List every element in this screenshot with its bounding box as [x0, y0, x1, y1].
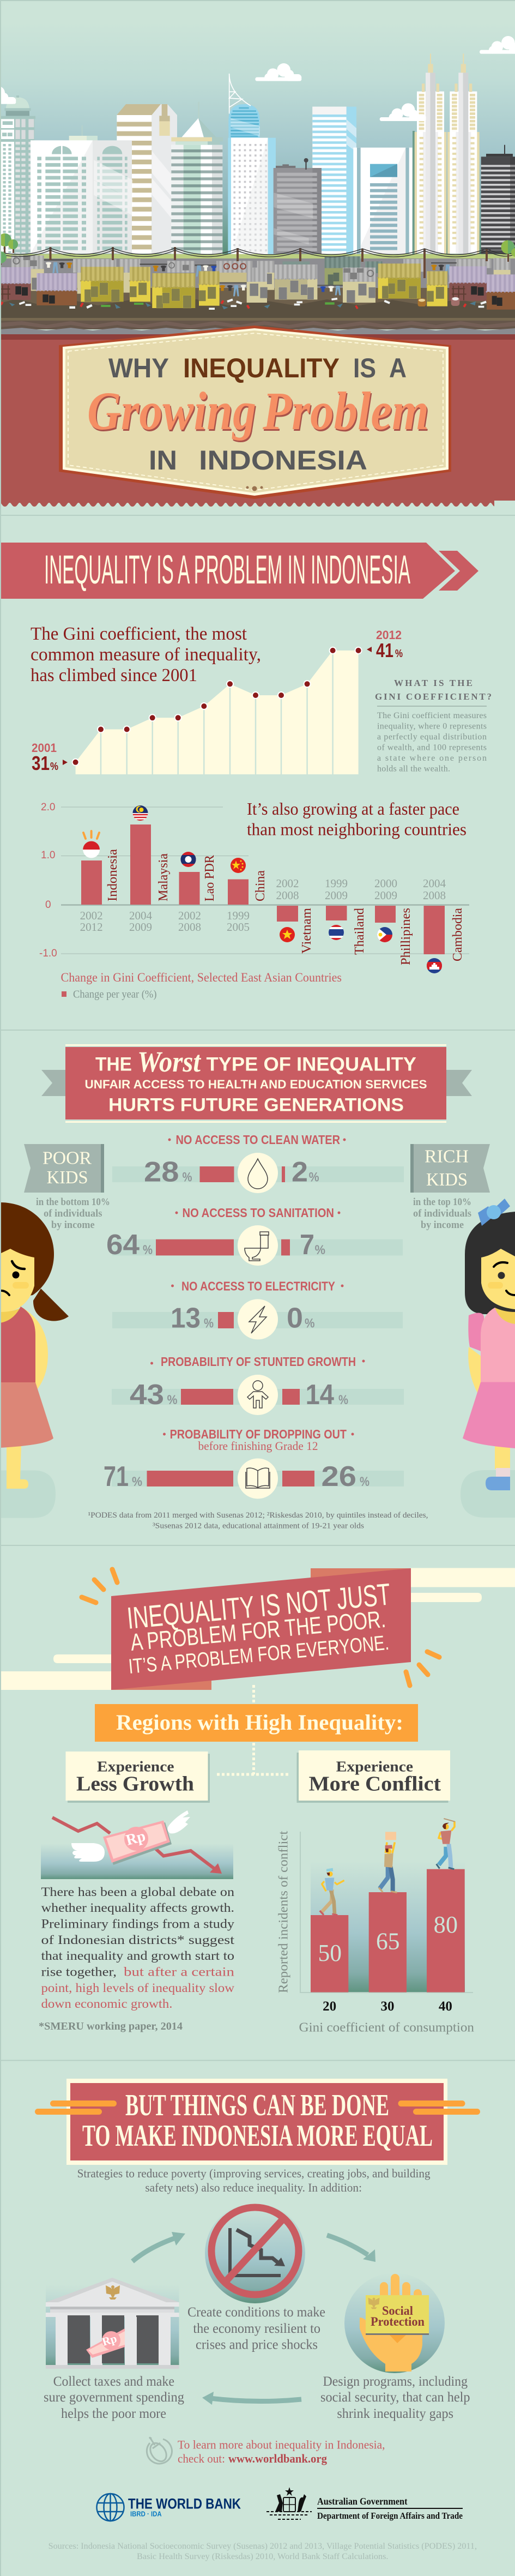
chart caption and legend: Change in Gini Coefficient, Selected East Asian Countries	[61, 971, 342, 984]
gini definition text: inequality, where 0 represents	[377, 721, 487, 731]
row: no access to electricity	[112, 1279, 403, 1339]
chart: conflict by gini: 30	[380, 1999, 395, 2014]
orange heading: regions with high inequality: Regions with High Inequality:	[116, 1710, 403, 1735]
call to action: To learn more about inequality in Indonesia,	[178, 2437, 385, 2451]
logo: australian government: Department of Foreign Affairs and Trade	[317, 2511, 463, 2521]
text: collect taxes: helps the poor more	[61, 2406, 166, 2421]
text: collect taxes	[44, 2374, 184, 2421]
arrow: no-chart to hand	[327, 2235, 375, 2262]
illustration: government building: Rp	[100, 2332, 118, 2349]
label 2001: %	[50, 761, 58, 773]
label 2012: %	[395, 648, 403, 660]
rich kids description: by income	[421, 1219, 464, 1231]
intro text: strategies	[77, 2166, 431, 2194]
text: create conditions: the economy resilient to	[193, 2321, 320, 2336]
gini definition text	[375, 678, 492, 773]
title line 1: INEQUALITY	[183, 353, 340, 383]
sources: Basic Health Survey (Riskesdas) 2010, World Bank Staff Calculations.	[137, 2552, 388, 2561]
icon: lightning bolt	[249, 1306, 266, 1333]
neighbours headline	[247, 799, 466, 839]
row: no access to electricity: 13	[171, 1302, 201, 1334]
skewed callout: not just a problem for the poor: IT’S A PROBLEM FOR EVERYONE.	[128, 1632, 390, 1678]
row: no access to electricity: NO ACCESS TO ELECTRICITY	[181, 1279, 335, 1293]
row: no access to sanitation: %	[315, 1243, 325, 1257]
row: no access to clean water: %	[182, 1170, 192, 1185]
gini headline: The Gini coefficient, the most	[31, 624, 247, 644]
footnotes: ³Susenas 2012 data, educational attainment of 19-21 year olds	[153, 1521, 364, 1530]
header ribbon: worst type of inequality: TYPE OF INEQUALITY	[206, 1054, 416, 1075]
country labels: Lao PDR	[203, 855, 217, 901]
logo: the world bank: THE WORLD BANK	[128, 2496, 241, 2512]
utility poles and wires	[0, 247, 515, 278]
huts right	[253, 256, 515, 310]
header ribbon: worst type of inequality	[41, 1044, 472, 1123]
row: probability of dropping out	[104, 1427, 404, 1498]
row: probability of dropping out: 26	[322, 1461, 356, 1492]
title line 1: IS	[353, 353, 376, 383]
year labels: 2008	[178, 920, 201, 934]
illustration: flying money and falling arrow: Rp	[124, 1828, 147, 1849]
chart: conflict by gini: Gini coefficient of consumption	[299, 2021, 474, 2035]
year labels: 1999	[325, 877, 348, 890]
country labels: Malaysia	[156, 853, 171, 901]
section heading arrow banner	[0, 543, 478, 599]
title script line: Growing	[87, 381, 256, 441]
year labels: 2005	[227, 920, 250, 934]
country labels	[106, 849, 465, 965]
row: no access to clean water: NO ACCESS TO CLEAN WATER	[175, 1133, 340, 1147]
illustration: flying money and falling arrow	[41, 1810, 233, 1879]
skewed callout: not just a problem for the poor	[0, 1568, 515, 1690]
box: experience more conflict: Experience	[336, 1759, 413, 1775]
title line 3: INDONESIA	[199, 445, 367, 476]
country labels: Indonesia	[106, 849, 120, 901]
call to action	[147, 2437, 385, 2465]
row: no access to sanitation: NO ACCESS TO SANITATION	[182, 1206, 334, 1220]
neighbours headline: It’s also growing at a faster pace	[247, 799, 459, 818]
text: design programs: Design programs, including	[323, 2374, 468, 2389]
chart: conflict by gini: 65	[376, 1928, 400, 1954]
title badge	[59, 326, 451, 499]
text: growth explanation: There has been a global debate on	[41, 1885, 235, 1899]
country labels: China	[253, 870, 268, 901]
icon: no falling chart	[205, 2203, 305, 2303]
icon: mouse	[147, 2437, 172, 2464]
illustration: poor girl	[0, 1202, 69, 1518]
row: no access to sanitation	[106, 1206, 403, 1266]
text: growth explanation: rise together,	[41, 1965, 117, 1978]
gini definition text: holds all the wealth.	[377, 765, 450, 773]
header ribbon: worst type of inequality: UNFAIR ACCESS TO HEALTH AND EDUCATION SERVICES	[85, 1078, 427, 1091]
icon: open book	[246, 1468, 270, 1488]
rich kids description: in the top 10%	[413, 1196, 471, 1208]
country labels: Thailand	[353, 908, 367, 955]
row: probability of dropping out: %	[360, 1474, 369, 1489]
footnotes: ¹PODES data from 2011 merged with Susenas 2012; ²Riskesdas 2010, by quintiles instead of deciles,	[88, 1511, 428, 1520]
arrow: hand to bank	[202, 2392, 301, 2405]
label 2012: 41	[376, 639, 393, 661]
title line 3: IN	[149, 445, 177, 476]
wing left	[71, 1843, 105, 1862]
huts left	[0, 255, 262, 310]
text: growth explanation: whether inequality affects growth.	[41, 1901, 234, 1915]
buildings left half	[0, 86, 223, 255]
title script line	[87, 381, 430, 443]
year labels	[80, 877, 446, 934]
icon: child	[247, 1381, 268, 1408]
intro text: strategies: Strategies to reduce poverty (improving services, creating jobs, and building	[77, 2166, 431, 2180]
chart: change in gini by country: 1.0	[41, 850, 55, 861]
gini headline	[31, 624, 261, 685]
title script line: Problem	[263, 382, 430, 443]
tag: poor kids: KIDS	[47, 1167, 88, 1188]
illustration: social protection hand	[344, 2273, 445, 2373]
text: collect taxes: Collect taxes and make	[53, 2374, 174, 2389]
year labels: 2004	[423, 877, 446, 890]
text: growth explanation: Preliminary findings from a study	[41, 1917, 235, 1930]
tag: rich kids	[410, 1144, 490, 1193]
call to action: www.worldbank.org	[228, 2452, 327, 2465]
title line 1	[108, 353, 407, 383]
box: experience less growth: Experience	[97, 1759, 174, 1775]
tag: poor kids	[24, 1144, 104, 1193]
chart: conflict by gini: 50	[318, 1940, 342, 1966]
row: no access to electricity: %	[305, 1316, 315, 1331]
source note: SMERU: *SMERU working paper, 2014	[39, 2020, 183, 2032]
year labels: 2008	[276, 889, 299, 902]
gini definition text: GINI COEFFICIENT?	[375, 691, 492, 702]
row: no access to clean water: %	[309, 1170, 319, 1185]
chart: conflict by gini: 80	[434, 1911, 458, 1938]
row: no access to electricity: 0	[287, 1302, 303, 1334]
text: design programs	[320, 2374, 470, 2421]
flags	[82, 805, 443, 974]
sources	[49, 2542, 477, 2561]
illustration: social protection hand: Protection	[371, 2315, 425, 2328]
row: probability of stunted growth: %	[167, 1393, 178, 1407]
country labels: Phillipines	[399, 908, 413, 965]
gini definition text: a state where one person	[377, 754, 487, 763]
year labels: 2002	[276, 877, 299, 890]
text: create conditions	[187, 2305, 325, 2352]
header ribbon: worst type of inequality: THE	[95, 1054, 132, 1075]
gini definition text: of wealth, and 100 represents	[377, 743, 487, 752]
label 2012: 2012	[376, 628, 402, 642]
illustration: riverside shanty town	[0, 233, 515, 334]
year labels: 2009	[374, 889, 397, 902]
year labels: 1999	[227, 909, 250, 922]
title line 1: A	[389, 353, 407, 383]
text: growth explanation: point, high levels of inequality slow	[41, 1981, 234, 1995]
poor kids description	[36, 1196, 110, 1231]
arrow: bank to no-chart	[132, 2232, 185, 2261]
text: growth explanation: but after a certain	[124, 1965, 235, 1978]
trees	[0, 233, 515, 265]
neighbours headline: than most neighboring countries	[247, 819, 466, 839]
embankment	[0, 254, 515, 259]
dotted connectors	[217, 1685, 290, 1774]
year labels: 2002	[178, 909, 201, 922]
logo: the world bank	[97, 2494, 241, 2521]
illustration: rich girl	[461, 1199, 515, 1518]
header ribbon: worst type of inequality: Worst	[137, 1045, 202, 1078]
country labels: Vietnam	[300, 908, 314, 954]
icon: water drop	[248, 1159, 268, 1189]
illustration: government building	[46, 2278, 179, 2369]
skewed callout: not just a problem for the poor: INEQUALITY IS NOT JUST	[125, 1576, 392, 1635]
label 2012	[367, 628, 403, 661]
row: probability of dropping out: before finishing Grade 12	[198, 1439, 318, 1453]
row: no access to clean water	[112, 1133, 404, 1193]
row: probability of stunted growth: PROBABILITY OF STUNTED GROWTH	[161, 1355, 356, 1369]
row: probability of stunted growth	[112, 1355, 404, 1415]
row: no access to clean water: 28	[144, 1157, 179, 1188]
row: probability of stunted growth: 14	[306, 1379, 334, 1411]
header ribbon: worst type of inequality: HURTS FUTURE GENERATIONS	[108, 1095, 404, 1116]
label 2001	[32, 741, 68, 774]
logo: australian government	[266, 2487, 463, 2521]
chart caption and legend: Change per year (%)	[73, 988, 157, 1000]
gini headline: common measure of inequality,	[31, 645, 261, 665]
year labels: 2009	[325, 889, 348, 902]
row: probability of dropping out: PROBABILITY OF DROPPING OUT	[170, 1427, 347, 1441]
year labels: 2004	[129, 909, 153, 922]
text: create conditions: crises and price shocks	[196, 2337, 318, 2352]
illustration: city skyline	[0, 0, 515, 256]
tag: rich kids: RICH	[425, 1146, 469, 1167]
chart: change in gini by country: 2.0	[41, 802, 55, 813]
title line 3	[149, 445, 367, 476]
chart caption and legend	[61, 971, 342, 1000]
icon: toilet	[245, 1232, 269, 1261]
year labels: 2002	[80, 909, 103, 922]
text: growth explanation: of Indonesian districts* suggest	[41, 1933, 235, 1947]
chart: conflict by gini	[277, 1819, 474, 2035]
box: experience more conflict	[296, 1750, 450, 1803]
text: growth explanation: that inequality and growth start to	[41, 1949, 234, 1963]
chart: conflict by gini: Reported incidents of conflict	[277, 1831, 291, 1993]
box: experience more conflict: More Conflict	[309, 1773, 441, 1796]
header: but things can be done	[35, 2079, 480, 2165]
year labels: 2009	[129, 920, 152, 934]
tag: poor kids: POOR	[43, 1148, 92, 1168]
sky	[0, 0, 515, 256]
gini definition text: The Gini coefficient measures	[377, 711, 487, 720]
illustration: social protection hand: Social	[382, 2304, 413, 2318]
text: growth explanation: down economic growth.	[41, 1997, 172, 2011]
poor kids description: in the bottom 10%	[36, 1196, 110, 1208]
text: design programs: social security, that can help	[320, 2390, 470, 2405]
gini headline: has climbed since 2001	[31, 665, 197, 685]
row: no access to clean water: 2	[292, 1157, 308, 1188]
label 2001: 31	[32, 752, 50, 774]
row: probability of dropping out: %	[132, 1474, 142, 1489]
poor kids description: of individuals	[44, 1208, 102, 1219]
chart: gini area line	[32, 628, 403, 774]
buildings right half	[228, 36, 515, 254]
box: experience less growth: Less Growth	[76, 1773, 194, 1796]
text: growth explanation	[41, 1885, 235, 2011]
row: no access to electricity: %	[204, 1316, 214, 1331]
poor kids description: by income	[51, 1219, 95, 1231]
text: collect taxes: sure government spending	[44, 2390, 184, 2405]
logo: australian government: Australian Government	[317, 2496, 408, 2507]
title line 1: WHY	[108, 353, 169, 383]
sources: Sources: Indonesia National Socioeconomic Survey (Susenas) 2012 and 2013, Village Potential Statistics (PODES) 2011,	[49, 2542, 477, 2551]
skewed callout: not just a problem for the poor: A PROBLEM FOR THE POOR.	[129, 1606, 387, 1656]
call to action: check out:	[178, 2452, 225, 2465]
year labels: 2008	[423, 889, 446, 902]
rich kids description	[413, 1196, 471, 1231]
box: experience less growth	[65, 1752, 210, 1803]
row: no access to sanitation: 64	[106, 1229, 140, 1261]
title banner background	[0, 334, 515, 507]
footnotes	[88, 1511, 428, 1530]
year labels: 2000	[374, 877, 397, 890]
chart: conflict by gini: 40	[439, 1999, 452, 2014]
row: probability of dropping out: 71	[104, 1461, 129, 1492]
tag: rich kids: KIDS	[426, 1170, 468, 1190]
logo: the world bank: IBRD · IDA	[130, 2509, 162, 2518]
chart: change in gini by country: 0	[45, 899, 51, 911]
bars	[81, 824, 445, 954]
wing right	[168, 1810, 190, 1833]
chart: change in gini by country	[39, 802, 469, 974]
row: probability of stunted growth: 43	[130, 1379, 164, 1411]
gini definition text: WHAT IS THE	[394, 678, 472, 688]
chart: change in gini by country: -1.0	[39, 948, 57, 959]
label 2001: 2001	[32, 741, 57, 755]
title script line: Problem	[262, 381, 429, 441]
people on bars	[320, 1819, 455, 1915]
year labels: 2012	[80, 920, 103, 934]
text: create conditions: Create conditions to make	[187, 2305, 325, 2320]
text: design programs: shrink inequality gaps	[337, 2406, 453, 2421]
gini definition text: a perfectly equal distribution	[377, 732, 487, 742]
row: no access to sanitation: %	[143, 1243, 153, 1257]
orange heading: regions with high inequality	[95, 1704, 418, 1742]
chart: conflict by gini: 20	[323, 1999, 336, 2014]
country labels: Cambodia	[451, 908, 465, 961]
row: no access to sanitation: 7	[300, 1229, 314, 1261]
intro text: strategies: safety nets) also reduce inequality. In addition:	[145, 2181, 362, 2194]
title script line: Growing	[88, 382, 257, 443]
rich kids description: of individuals	[413, 1208, 471, 1219]
row: probability of stunted growth: %	[338, 1393, 348, 1407]
